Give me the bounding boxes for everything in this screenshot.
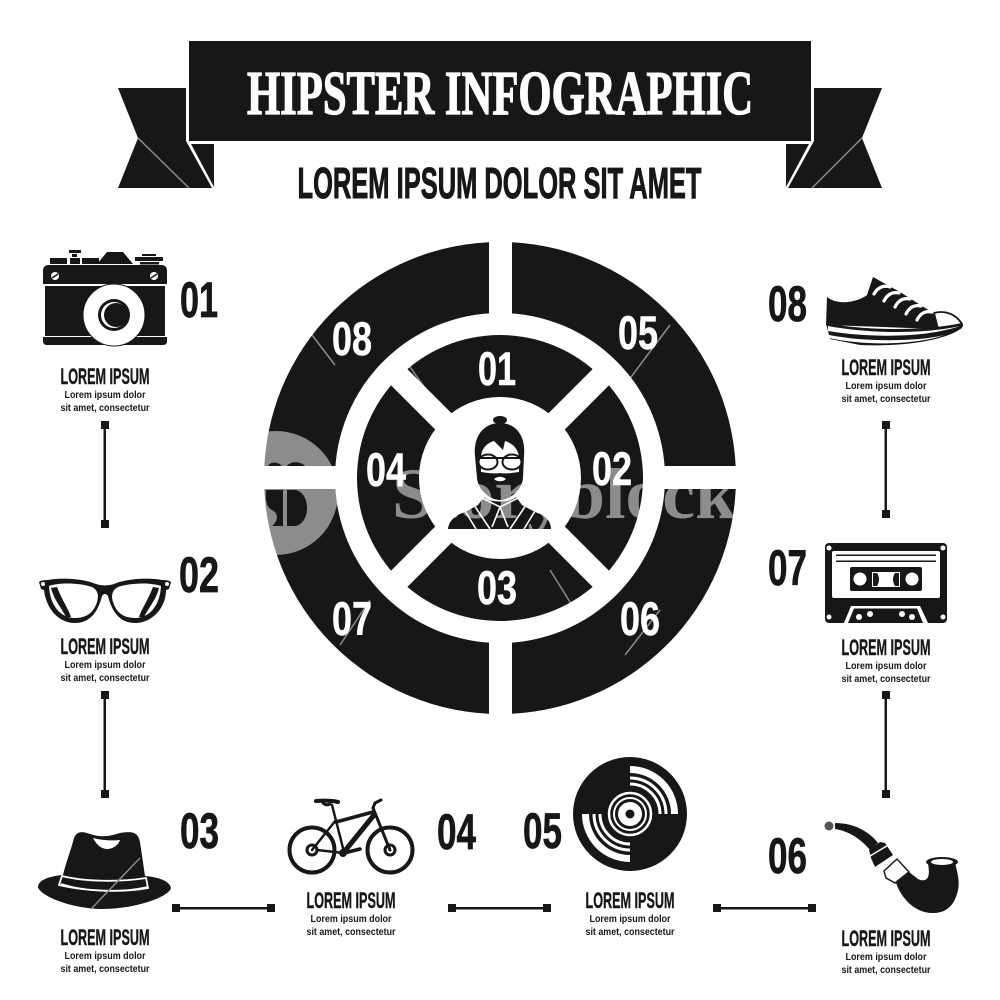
segment number 03: 03 xyxy=(477,561,517,614)
caption 05 xyxy=(586,888,675,938)
connector 02 to 03 xyxy=(101,691,109,798)
caption 02 xyxy=(60,634,150,684)
ribbon centre xyxy=(189,41,811,141)
segment number 06: 06 xyxy=(620,592,660,645)
item 02: glasses xyxy=(39,547,219,684)
segment number 07: 07 xyxy=(332,592,372,645)
ribbon right fold xyxy=(786,144,809,187)
caption 06 xyxy=(842,926,931,976)
caption 02: sit amet, consectetur xyxy=(60,673,150,684)
icon: pipe xyxy=(824,822,959,913)
number 08: 08 xyxy=(768,276,807,332)
watermark xyxy=(92,138,862,908)
connector 03 to 04 xyxy=(172,904,275,912)
ribbon left tail xyxy=(118,88,212,188)
caption 03 xyxy=(60,925,150,975)
caption 01: Lorem ipsum dolor xyxy=(64,390,146,401)
icon: bicycle xyxy=(290,800,412,872)
caption 03: LOREM IPSUM xyxy=(60,925,150,950)
caption 04: LOREM IPSUM xyxy=(306,888,396,913)
caption 05: Lorem ipsum dolor xyxy=(590,914,671,925)
caption 08: LOREM IPSUM xyxy=(842,355,930,380)
icon: sneaker xyxy=(826,277,962,345)
item 04: bicycle xyxy=(290,800,476,938)
number 07: 07 xyxy=(768,540,807,596)
caption 07: LOREM IPSUM xyxy=(842,635,930,660)
caption 05: sit amet, consectetur xyxy=(586,927,675,938)
number 04: 04 xyxy=(437,804,476,860)
connector 05 to 06 xyxy=(713,904,816,912)
ribbon left fold xyxy=(191,144,214,187)
caption 07 xyxy=(842,635,931,685)
title text: HIPSTER INFOGRAPHIC xyxy=(247,60,753,128)
item 03: hat xyxy=(38,803,219,975)
segment number 04: 04 xyxy=(366,443,406,496)
caption 01: LOREM IPSUM xyxy=(60,364,150,389)
caption 08 xyxy=(842,355,931,405)
central donut chart xyxy=(262,240,738,716)
icon: glasses xyxy=(39,579,171,623)
caption 01 xyxy=(60,364,150,414)
number 06: 06 xyxy=(768,828,807,884)
item 05: vinyl record xyxy=(523,757,687,938)
caption 04 xyxy=(306,888,396,938)
item 07: cassette xyxy=(768,540,947,685)
subtitle: LOREM IPSUM DOLOR SIT AMET xyxy=(298,159,702,208)
icon: camera xyxy=(43,250,167,346)
item 01: camera xyxy=(43,250,218,414)
caption 07: Lorem ipsum dolor xyxy=(846,661,927,672)
caption 02: LOREM IPSUM xyxy=(60,634,150,659)
ribbon right tail xyxy=(788,88,882,188)
caption 06: sit amet, consectetur xyxy=(842,965,931,976)
number 01: 01 xyxy=(180,272,218,328)
icon: hipster portrait xyxy=(448,416,551,529)
icon: cassette xyxy=(825,543,947,623)
number 02: 02 xyxy=(179,547,219,603)
caption 03: sit amet, consectetur xyxy=(60,964,150,975)
segment number 01: 01 xyxy=(478,342,516,395)
connector 07 to 08 xyxy=(882,421,890,518)
caption 04: sit amet, consectetur xyxy=(306,927,396,938)
connector 01 to 02 xyxy=(101,421,109,528)
connector 06 to 07 xyxy=(882,691,890,798)
number 03: 03 xyxy=(180,803,219,859)
caption 02: Lorem ipsum dolor xyxy=(64,660,146,671)
segment number 08: 08 xyxy=(332,312,372,365)
caption 04: Lorem ipsum dolor xyxy=(310,914,392,925)
caption 08: sit amet, consectetur xyxy=(842,394,931,405)
watermark: Storyblock xyxy=(392,454,736,534)
caption 05: LOREM IPSUM xyxy=(586,888,674,913)
caption 06: Lorem ipsum dolor xyxy=(846,952,927,963)
caption 07: sit amet, consectetur xyxy=(842,674,931,685)
caption 06: LOREM IPSUM xyxy=(842,926,930,951)
segment number 02: 02 xyxy=(592,442,632,495)
item 08: sneaker xyxy=(768,276,962,405)
icon: vinyl record xyxy=(573,757,687,871)
caption 01: sit amet, consectetur xyxy=(60,403,150,414)
caption 03: Lorem ipsum dolor xyxy=(64,951,146,962)
item 06: pipe xyxy=(768,822,959,976)
connector 04 to 05 xyxy=(448,904,551,912)
icon: hat xyxy=(38,832,171,909)
segment number 05: 05 xyxy=(618,306,658,359)
caption 08: Lorem ipsum dolor xyxy=(846,381,927,392)
number 05: 05 xyxy=(523,803,562,859)
title banner xyxy=(118,41,882,188)
